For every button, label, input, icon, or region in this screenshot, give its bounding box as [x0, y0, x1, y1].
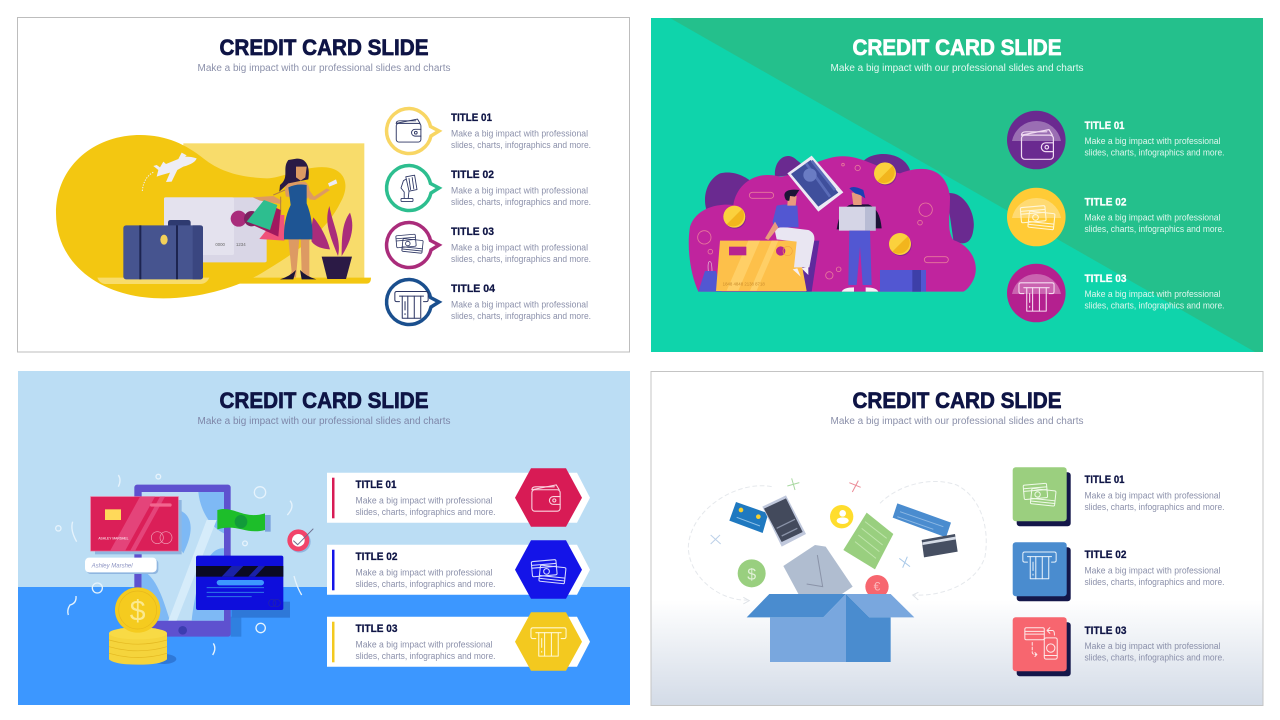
- item 01: Make a big impact with professional: [451, 128, 588, 138]
- illustration: woman shopping with credit card: [56, 135, 371, 298]
- banner 02: slides, charts, infographics and more.: [356, 579, 496, 589]
- item 02: slides, charts, infographics and more.: [451, 197, 591, 207]
- item 01: Make a big impact with professional: [1084, 136, 1220, 146]
- illustration: woman shopping with credit card: 1234: [236, 242, 246, 247]
- item 03: [1007, 264, 1224, 322]
- item 01: TITLE 01: [1084, 474, 1124, 486]
- item 03: [1013, 617, 1224, 676]
- icon: ATM tile: [1013, 542, 1071, 601]
- illustration: tablet, cards and coins: Ashley Marshel: [91, 563, 133, 569]
- item 02: Make a big impact with professional: [1084, 566, 1220, 576]
- banner 01: TITLE 01: [356, 479, 396, 491]
- subtitle: Make a big impact with our professional slides and charts: [198, 63, 450, 74]
- item 03: TITLE 03: [451, 226, 494, 238]
- icon: wallet disc: [1007, 111, 1066, 169]
- banner 01: [327, 468, 590, 527]
- item 02: Make a big impact with professional: [1084, 212, 1220, 222]
- illustration: tablet, cards and coins: ASHLEY MARSHEL: [98, 537, 129, 541]
- icon: cards bubble: [387, 222, 439, 267]
- item 03: slides, charts, infographics and more.: [451, 254, 591, 264]
- item 01: slides, charts, infographics and more.: [451, 140, 591, 150]
- illustration: people with cards on magenta blob: 1848 4848 2138 8718: [723, 281, 765, 286]
- banner 03: slides, charts, infographics and more.: [356, 651, 496, 661]
- banner 01: Make a big impact with professional: [356, 496, 492, 506]
- item 04: slides, charts, infographics and more.: [451, 311, 591, 321]
- panel: blue credit card slide: [18, 371, 630, 705]
- title: CREDIT CARD SLIDE: [852, 35, 1062, 60]
- item 02: [387, 165, 591, 210]
- item 03: Make a big impact with professional: [451, 242, 588, 252]
- icon: hand with card bubble: [387, 165, 439, 210]
- banner 03: TITLE 03: [356, 623, 398, 635]
- item 04: TITLE 04: [451, 283, 496, 295]
- subtitle: Make a big impact with our professional slides and charts: [830, 416, 1084, 427]
- title: CREDIT CARD SLIDE: [220, 388, 428, 413]
- item 01: slides, charts, infographics and more.: [1084, 148, 1224, 158]
- item 02: [1007, 188, 1224, 246]
- icon: ATM disc: [1007, 264, 1066, 322]
- item 02: TITLE 02: [451, 169, 494, 181]
- panel: yellow credit card slide: [18, 18, 630, 352]
- item 04: Make a big impact with professional: [451, 300, 588, 310]
- illustration: open box with cards: [688, 478, 986, 662]
- item 02: slides, charts, infographics and more.: [1084, 577, 1224, 587]
- item 01: Make a big impact with professional: [1084, 490, 1220, 500]
- item 02: Make a big impact with professional: [451, 186, 588, 196]
- item 01: [1007, 111, 1224, 169]
- banner 03: Make a big impact with professional: [356, 640, 492, 650]
- item 01: TITLE 01: [451, 112, 492, 124]
- illustration: open box with cards: $: [747, 566, 756, 583]
- illustration: tablet, cards and coins: [56, 474, 313, 665]
- item 02: [1013, 542, 1224, 601]
- illustration: tablet, cards and coins: $: [130, 595, 146, 627]
- subtitle: Make a big impact with our professional slides and charts: [830, 63, 1084, 74]
- icon: wallet hexagon: [515, 468, 582, 527]
- item 02: TITLE 02: [1084, 549, 1126, 561]
- item 02: slides, charts, infographics and more.: [1084, 224, 1224, 234]
- icon: wallet bubble: [387, 108, 439, 153]
- icon: ATM bubble: [387, 279, 439, 324]
- item 03: Make a big impact with professional: [1084, 289, 1220, 299]
- item 01: [1013, 467, 1224, 526]
- item 01: TITLE 01: [1084, 120, 1124, 132]
- subtitle: Make a big impact with our professional slides and charts: [198, 416, 450, 427]
- icon: phone and card swap tile: [1013, 617, 1071, 676]
- banner 02: Make a big impact with professional: [356, 568, 492, 578]
- icon: ATM hexagon: [515, 612, 582, 671]
- icon: cards hexagon: [515, 540, 582, 599]
- item 03: Make a big impact with professional: [1084, 641, 1220, 651]
- item 02: TITLE 02: [1084, 196, 1126, 208]
- illustration: woman shopping with credit card: 0000: [215, 242, 226, 247]
- banner 03: [327, 612, 590, 671]
- item 03: slides, charts, infographics and more.: [1084, 652, 1224, 662]
- item 03: slides, charts, infographics and more.: [1084, 300, 1224, 310]
- item 03: [387, 222, 591, 267]
- title: CREDIT CARD SLIDE: [220, 35, 428, 60]
- item 04: [387, 279, 591, 324]
- banner 02: TITLE 02: [356, 551, 398, 563]
- banner 02: [327, 540, 590, 599]
- item 03: TITLE 03: [1084, 273, 1126, 285]
- banner 01: slides, charts, infographics and more.: [356, 507, 496, 517]
- icon: cards tile: [1013, 467, 1071, 526]
- illustration: open box with cards: €: [874, 580, 881, 594]
- item 01: slides, charts, infographics and more.: [1084, 502, 1224, 512]
- item 01: [387, 108, 591, 153]
- item 03: TITLE 03: [1084, 625, 1126, 637]
- icon: cards disc: [1007, 188, 1066, 246]
- panel: white gradient credit card slide: [651, 372, 1263, 706]
- title: CREDIT CARD SLIDE: [852, 388, 1062, 413]
- illustration: people with cards on magenta blob: [689, 154, 976, 292]
- panel: green credit card slide: [651, 18, 1263, 352]
